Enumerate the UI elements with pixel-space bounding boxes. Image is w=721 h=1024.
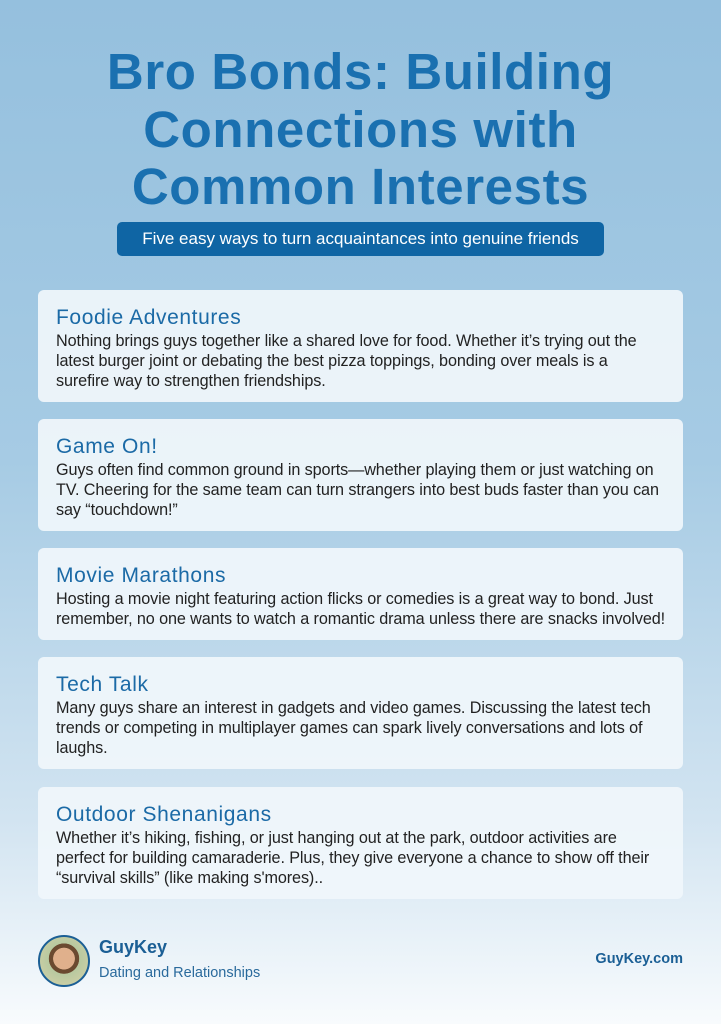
panel: tech talk: Many guys share an interest in gadgets and video games. Discussing the latest tech <box>56 699 651 717</box>
panel: foodie adventures <box>38 290 683 402</box>
panel: movie marathons <box>38 548 683 640</box>
brand name: GuyKey <box>99 937 167 957</box>
title <box>107 43 614 215</box>
panel: outdoor shenanigans: Outdoor Shenanigans <box>56 803 272 826</box>
panel: tech talk: Tech Talk <box>56 673 149 696</box>
website: GuyKey.com <box>595 951 683 967</box>
title: Bro Bonds: Building <box>107 43 614 100</box>
panel: outdoor shenanigans: Whether it’s hiking, fishing, or just hanging out at the park, outdoor activities are <box>56 829 617 847</box>
panel: game on: Game On! <box>56 435 158 458</box>
icon: avatar <box>38 935 90 987</box>
panel: game on <box>38 419 683 531</box>
panel: outdoor shenanigans: perfect for building camaraderie. Plus, they give everyone a chance to show off their <box>56 849 649 867</box>
panel: game on: Guys often find common ground in sports—whether playing them or just watching on <box>56 461 654 479</box>
panel: tech talk: trends or competing in multiplayer games can spark lively conversations and lots of <box>56 719 642 737</box>
footer <box>38 935 683 987</box>
panel: movie marathons: Hosting a movie night featuring action flicks or comedies is a great way to bond. Just <box>56 590 653 608</box>
brand tagline: Dating and Relationships <box>99 965 260 981</box>
panel: outdoor shenanigans: “survival skills” (like making s'mores).. <box>56 869 323 887</box>
panel: foodie adventures: surefire way to strengthen friendships. <box>56 372 326 390</box>
panel: tech talk: laughs. <box>56 739 108 757</box>
panel: movie marathons: Movie Marathons <box>56 564 226 587</box>
panel: foodie adventures: latest burger joint or debating the best pizza toppings, bonding over meals is a <box>56 352 608 370</box>
panel: tech talk <box>38 657 683 769</box>
panel: movie marathons: remember, no one wants to watch a romantic drama unless there are snacks involved! <box>56 610 665 628</box>
title: Common Interests <box>132 158 589 215</box>
panel: outdoor shenanigans <box>38 787 683 899</box>
panel: game on: TV. Cheering for the same team can turn strangers into best buds faster than you can <box>56 481 659 499</box>
panel: game on: say “touchdown!” <box>56 501 178 519</box>
subtitle pill <box>117 222 604 256</box>
title: Connections with <box>143 100 578 158</box>
panel: foodie adventures: Foodie Adventures <box>56 306 241 329</box>
subtitle pill: Five easy ways to turn acquaintances into genuine friends <box>142 229 579 248</box>
panel: foodie adventures: Nothing brings guys together like a shared love for food. Whether it’s trying out the <box>56 332 637 350</box>
